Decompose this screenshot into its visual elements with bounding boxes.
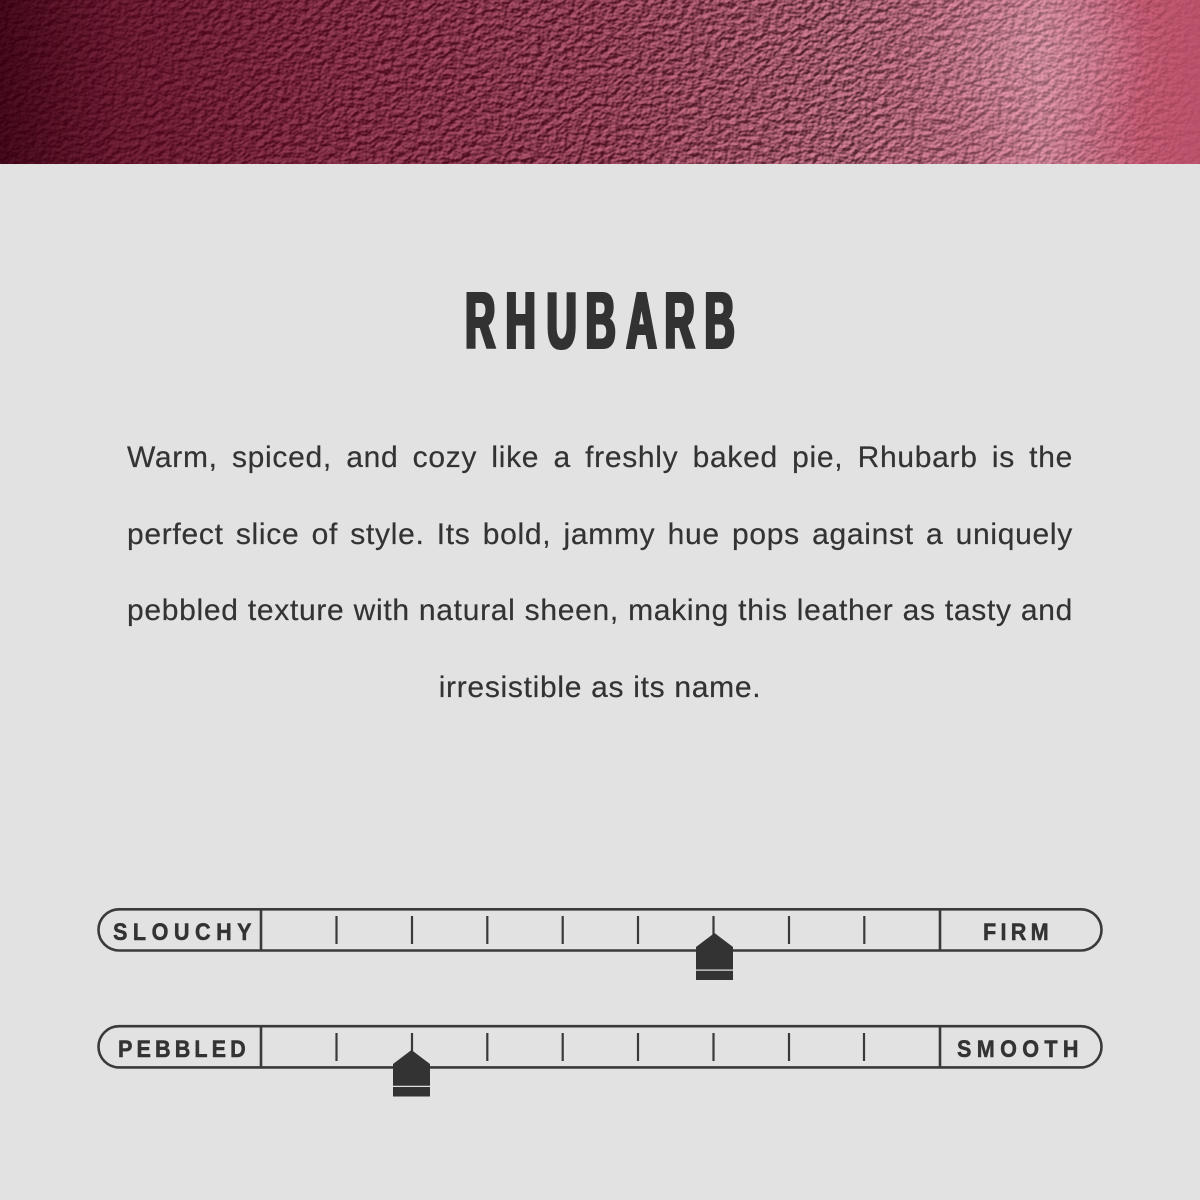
description text bbox=[127, 441, 1073, 704]
label: firm: FIRM bbox=[983, 918, 1049, 945]
scale rail bbox=[98, 909, 1102, 951]
description text: irresistible as its name. bbox=[439, 671, 761, 704]
marker bbox=[696, 933, 733, 980]
scale: pebbled to smooth bbox=[97, 1024, 1103, 1096]
description text: Warm, spiced, and cozy like a freshly baked pie, Rhubarb is the bbox=[127, 441, 1073, 474]
label: smooth: SMOOTH bbox=[957, 1035, 1079, 1062]
title: RHUBARB bbox=[465, 275, 735, 366]
scale: slouchy to firm bbox=[97, 908, 1103, 980]
description text: perfect slice of style. Its bold, jammy hue pops against a uniquely bbox=[127, 518, 1073, 551]
scale rail bbox=[98, 1026, 1102, 1068]
description text: pebbled texture with natural sheen, making this leather as tasty and bbox=[127, 594, 1073, 627]
marker bbox=[393, 1050, 430, 1096]
label: slouchy: SLOUCHY bbox=[113, 918, 252, 945]
leather texture banner bbox=[0, 0, 1200, 164]
label: pebbled: PEBBLED bbox=[118, 1035, 246, 1062]
